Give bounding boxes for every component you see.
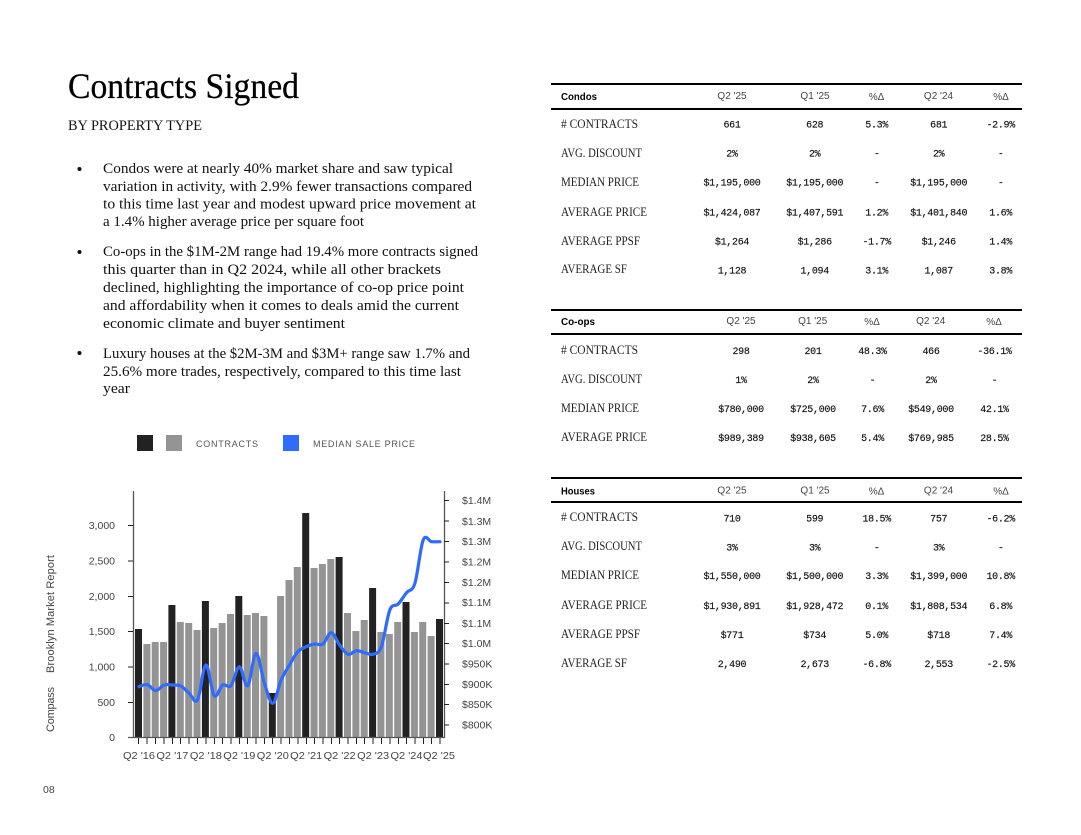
row: median price: $1,550,000	[703, 571, 761, 583]
row: average sf: 2,673	[800, 660, 829, 671]
row: average sf: 1,087	[924, 266, 953, 277]
row: avg. discount: AVG. DISCOUNT	[561, 539, 642, 553]
header row: condos: %Δ	[869, 92, 885, 103]
header row: houses: Q2 '25	[717, 486, 747, 496]
row: average sf: -2.5%	[986, 660, 1015, 671]
row: avg. discount: -	[874, 543, 880, 554]
row: average ppsf: 7.4%	[989, 631, 1012, 642]
header row: condos: Condos	[561, 92, 597, 103]
row: # contracts: # CONTRACTS	[561, 510, 638, 524]
row: # contracts: 201	[804, 347, 822, 358]
row: avg. discount	[561, 372, 997, 387]
row: # contracts	[561, 117, 1015, 131]
row: average price: $1,808,534	[910, 601, 968, 613]
row: average ppsf: $718	[927, 630, 950, 642]
row: avg. discount: 2%	[807, 376, 819, 387]
right axis labels: median price: $900K	[462, 679, 492, 691]
right axis labels: median price: $1.1M	[462, 618, 491, 630]
row: average price: 28.5%	[980, 434, 1009, 445]
row: average ppsf: AVERAGE PPSF	[561, 627, 640, 641]
row: avg. discount	[561, 146, 1004, 160]
header row: co-ops	[561, 316, 1002, 328]
row: median price: $1,195,000	[910, 177, 968, 189]
row: average price: $1,930,891	[703, 601, 761, 613]
row: avg. discount: AVG. DISCOUNT	[561, 372, 642, 386]
x axis labels: quarters: Q2 '24	[390, 750, 423, 762]
row: average price: $1,928,472	[786, 601, 844, 613]
text block: commentary bullets	[78, 160, 478, 397]
header row: co-ops: Co-ops	[561, 317, 595, 328]
row: average ppsf: $1,264	[715, 236, 749, 248]
row: median price: $549,000	[908, 404, 954, 416]
row: avg. discount: -	[998, 543, 1004, 554]
row: average price: 0.1%	[865, 602, 888, 613]
row: median price: MEDIAN PRICE	[561, 175, 639, 189]
row: # contracts: # CONTRACTS	[561, 343, 638, 357]
row: average price: $938,605	[790, 433, 836, 445]
row: # contracts: 599	[806, 514, 824, 525]
axes and ticks	[128, 491, 449, 744]
row: avg. discount	[561, 539, 1004, 554]
row: # contracts: 681	[930, 120, 948, 131]
row: average ppsf: AVERAGE PPSF	[561, 234, 640, 248]
row: avg. discount: AVG. DISCOUNT	[561, 146, 642, 160]
row: average price: AVERAGE PRICE	[561, 598, 647, 612]
bullet: co-ops: Co-ops in the $1M-2M range had 19.4% more contracts signed	[103, 243, 478, 260]
x axis labels: quarters: Q2 '20	[257, 750, 289, 762]
header row: condos: Q1 '25	[800, 91, 830, 102]
header row: condos: %Δ	[993, 92, 1009, 103]
row: # contracts: -6.2%	[986, 514, 1015, 525]
row: median price: 7.6%	[861, 405, 884, 416]
bullet: co-ops	[78, 243, 478, 332]
left axis labels: contracts: 2,000	[89, 591, 115, 603]
bullet: co-ops: economic climate and buyer sentiment	[103, 315, 346, 332]
side label: report name	[45, 555, 57, 732]
combo chart: contracts bars and median sale price line	[89, 491, 492, 762]
bars: contracts	[135, 513, 443, 737]
header row: condos: Q2 '24	[924, 91, 954, 102]
row: average price: $769,985	[908, 433, 954, 445]
row: average ppsf: 5.0%	[865, 631, 888, 642]
right axis labels: median price: $1.0M	[462, 638, 491, 650]
left axis labels: contracts: 500	[97, 697, 115, 709]
row: average ppsf: $771	[721, 630, 744, 642]
row: average sf: 1,128	[718, 266, 747, 277]
row: average sf: AVERAGE SF	[561, 262, 627, 276]
x axis labels: quarters: Q2 '22	[324, 750, 356, 762]
header row: co-ops: %Δ	[986, 317, 1002, 328]
row: average price: AVERAGE PRICE	[561, 205, 647, 219]
header row: houses: %Δ	[869, 486, 885, 498]
right axis labels: median price: $1.4M	[462, 495, 491, 507]
right axis labels: median price: $1.1M	[462, 597, 491, 609]
right axis labels: median price: $950K	[462, 658, 492, 670]
row: average sf: 3.8%	[989, 266, 1012, 277]
row: average price	[561, 205, 1012, 219]
bullet: condos	[78, 160, 477, 230]
row: median price	[561, 175, 1004, 189]
row: avg. discount: 3%	[933, 543, 945, 554]
row: # contracts: 298	[732, 347, 750, 358]
x axis labels: quarters: Q2 '17	[156, 750, 189, 762]
row: # contracts: 757	[930, 514, 948, 525]
title: Contracts Signed	[68, 66, 299, 106]
x axis labels: quarters: Q2 '23	[357, 750, 389, 762]
left axis labels: contracts	[89, 520, 115, 744]
row: average price: 5.4%	[861, 434, 884, 445]
panel: houses table	[551, 477, 1022, 671]
row: average ppsf: -1.7%	[862, 237, 891, 248]
header row: houses: Houses	[561, 486, 595, 498]
x axis labels: quarters: Q2 '19	[223, 750, 255, 762]
side label: report name: Compass	[45, 686, 57, 732]
line: median sale price	[139, 537, 440, 703]
row: average sf: -6.8%	[862, 660, 891, 671]
row: median price: 42.1%	[980, 405, 1009, 416]
bullet: co-ops: this quarter than in Q2 2024, while all other brackets	[103, 261, 441, 278]
row: average sf: AVERAGE SF	[561, 656, 627, 670]
bullet: houses	[78, 345, 470, 397]
row: # contracts: -36.1%	[977, 347, 1012, 358]
panel: co-ops table	[551, 309, 1022, 445]
row: average ppsf: $1,246	[922, 236, 956, 248]
row: avg. discount: -	[992, 376, 997, 387]
left axis labels: contracts: 1,500	[89, 626, 115, 638]
right axis labels: median price: $1.3M	[462, 516, 491, 528]
row: median price: $1,195,000	[786, 177, 844, 189]
row: avg. discount: 2%	[933, 149, 945, 160]
x axis labels: quarters: Q2 '16	[123, 750, 155, 762]
chart legend: MEDIAN SALE PRICE	[313, 439, 415, 449]
row: median price: MEDIAN PRICE	[561, 568, 639, 582]
row: median price: MEDIAN PRICE	[561, 401, 639, 415]
subtitle: BY PROPERTY TYPE	[68, 118, 202, 134]
row: average ppsf: $734	[803, 630, 826, 642]
bullet: co-ops: and affordability when it comes to deals amid the current	[103, 297, 460, 314]
row: avg. discount: 1%	[735, 376, 747, 387]
header row: condos	[561, 91, 1009, 103]
row: # contracts: 18.5%	[862, 514, 891, 525]
row: average ppsf	[561, 627, 1012, 642]
row: median price: 3.3%	[865, 572, 888, 583]
row: # contracts	[561, 510, 1015, 525]
right axis labels: median price: $850K	[462, 699, 492, 711]
page number: 08	[43, 784, 55, 796]
bullet: condos: to this time last year and modest upward price movement at	[103, 196, 477, 212]
row: avg. discount: 2%	[925, 376, 937, 387]
right axis labels: median price: $1.3M	[462, 536, 491, 548]
row: # contracts: # CONTRACTS	[561, 117, 638, 131]
row: # contracts: 466	[922, 347, 940, 358]
bullet: houses: Luxury houses at the $2M-3M and $3M+ range saw 1.7% and	[103, 345, 470, 362]
right axis labels: median price	[462, 495, 492, 732]
row: # contracts: 5.3%	[865, 120, 888, 131]
row: avg. discount: -	[874, 149, 880, 160]
left axis labels: contracts: 2,500	[89, 556, 115, 568]
bullet: houses: year	[103, 380, 130, 397]
row: median price: $725,000	[790, 404, 836, 416]
row: average price	[561, 598, 1012, 613]
bullet: condos: Condos were at nearly 40% market share and saw typical	[103, 160, 453, 177]
row: avg. discount: 2%	[726, 149, 738, 160]
row: average ppsf: 1.4%	[989, 237, 1012, 248]
row: average sf: 3.1%	[865, 266, 888, 277]
row: average ppsf	[561, 234, 1012, 248]
row: # contracts: 628	[806, 120, 824, 131]
row: average price: $1,401,840	[910, 207, 968, 219]
row: average sf	[561, 656, 1015, 671]
left axis labels: contracts: 3,000	[89, 520, 115, 532]
row: average price: 1.6%	[989, 208, 1012, 219]
row: average price: AVERAGE PRICE	[561, 430, 647, 444]
row: median price: 10.8%	[986, 572, 1015, 583]
row: average sf: 2,553	[924, 660, 953, 671]
chart legend	[137, 435, 415, 451]
x axis labels: quarters: Q2 '18	[190, 750, 222, 762]
row: average sf: 1,094	[800, 266, 829, 277]
row: avg. discount: 3%	[726, 543, 738, 554]
row: average price: $989,389	[718, 433, 764, 445]
row: average price: $1,424,087	[703, 207, 761, 219]
header row: houses	[561, 486, 1009, 498]
row: median price	[561, 568, 1015, 583]
row: median price	[561, 401, 1009, 416]
header row: co-ops: Q1 '25	[798, 316, 828, 327]
header row: houses: %Δ	[993, 486, 1009, 498]
bullet: co-ops: declined, highlighting the importance of co-op price point	[103, 279, 465, 296]
right axis labels: median price: $1.2M	[462, 577, 491, 589]
row: average price	[561, 430, 1009, 445]
row: # contracts: 48.3%	[858, 347, 887, 358]
row: avg. discount: -	[998, 149, 1004, 160]
right axis labels: median price: $800K	[462, 720, 492, 732]
row: average price: $1,407,591	[786, 207, 844, 219]
x axis labels: quarters: Q2 '21	[290, 750, 322, 762]
header row: houses: Q2 '24	[924, 486, 954, 496]
x axis labels: quarters	[123, 750, 455, 762]
row: average price: 6.8%	[989, 602, 1012, 613]
row: median price: $1,500,000	[786, 571, 844, 583]
row: # contracts: 710	[723, 514, 741, 525]
row: average sf	[561, 262, 1012, 277]
header row: co-ops: Q2 '24	[916, 316, 946, 327]
row: average sf: 2,490	[718, 660, 747, 671]
x axis labels: quarters: Q2 '25	[423, 750, 455, 762]
bullet: condos: a 1.4% higher average price per square foot	[103, 213, 365, 230]
row: average ppsf: $1,286	[798, 236, 832, 248]
header row: co-ops: %Δ	[864, 317, 880, 328]
row: median price: $1,399,000	[910, 571, 968, 583]
row: median price: $1,195,000	[703, 177, 761, 189]
row: avg. discount: 3%	[809, 543, 821, 554]
bullet: condos: variation in activity, with 2.9% fewer transactions compared	[103, 178, 472, 195]
header row: houses: Q1 '25	[800, 486, 830, 496]
bullet: houses: 25.6% more trades, respectively, compared to this time last	[103, 363, 462, 380]
right axis labels: median price: $1.2M	[462, 556, 491, 568]
row: median price: -	[874, 178, 880, 189]
header row: condos: Q2 '25	[717, 91, 747, 102]
row: median price: $780,000	[718, 404, 764, 416]
row: # contracts	[561, 343, 1012, 358]
row: avg. discount: -	[870, 376, 875, 387]
chart legend: CONTRACTS	[196, 439, 258, 449]
row: average price: 1.2%	[865, 208, 888, 219]
left axis labels: contracts: 0	[109, 732, 115, 744]
side label: report name: Brooklyn Market Report	[45, 555, 57, 673]
row: # contracts: -2.9%	[986, 120, 1015, 131]
row: # contracts: 661	[723, 120, 741, 131]
header row: co-ops: Q2 '25	[726, 316, 756, 327]
row: median price: -	[998, 178, 1004, 189]
panel: condos table	[551, 83, 1022, 277]
left axis labels: contracts: 1,000	[89, 662, 115, 674]
row: avg. discount: 2%	[809, 149, 821, 160]
